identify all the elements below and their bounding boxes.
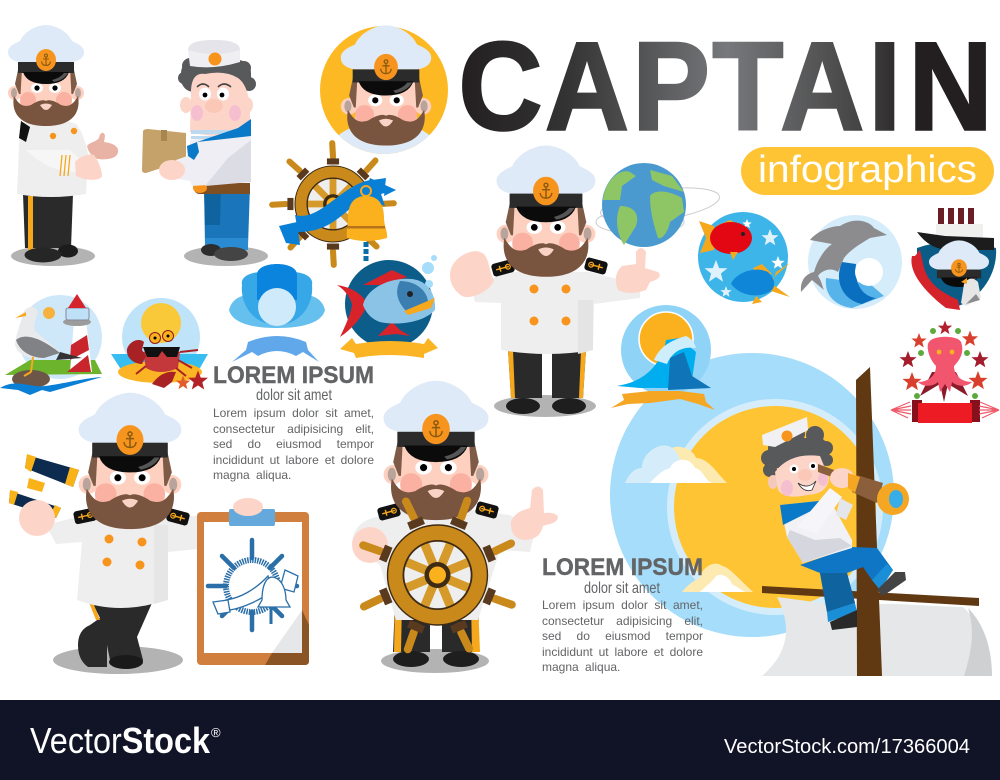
text block: body copy 2: incididunt ut labore et dolore (542, 644, 703, 658)
heading: Lorem Ipsum block 2 (542, 554, 703, 597)
clipboard with wheel sketch (197, 498, 309, 665)
text block: body copy 2: Lorem ipsum dolor sit amet, (542, 598, 703, 612)
title: CAPTAIN: CAPTAIN (458, 17, 993, 156)
footer bar with VectorStock branding: VectorStock (30, 720, 211, 761)
sailor with parcel (142, 40, 268, 266)
text block: body copy 1: consectetur adipisicing elit, (213, 422, 374, 436)
pill: infographics subtitle: infographics (758, 149, 977, 191)
text block: body copy 2 (542, 598, 703, 674)
icon: pearl shell with ribbon (229, 264, 325, 362)
mast and yard (762, 367, 979, 676)
sailor climbing mast with spyglass (761, 417, 909, 630)
text block: body copy 1: magna aliqua. (213, 468, 291, 482)
head: captain (8, 25, 84, 126)
icon: ship wheel (333, 470, 542, 680)
icon: two tropical fish (698, 212, 790, 304)
icon: angler fish (337, 255, 438, 358)
heading: Lorem Ipsum block 1 (213, 362, 374, 404)
icon: captain portrait in circle (320, 26, 448, 154)
heading: Lorem Ipsum block 2: LOREM IPSUM (542, 554, 703, 581)
icon: octopus with starfish wreath and banner (891, 320, 999, 423)
captain spinning a globe (450, 146, 660, 417)
scene: sun, sky, clouds behind mast (610, 353, 894, 637)
heading: Lorem Ipsum block 1: dolor sit amet (256, 387, 332, 404)
captain presenting, top left (8, 25, 118, 266)
icon: crab with sunglasses (111, 298, 208, 390)
icon: dolphin and wave (801, 215, 902, 309)
text block: body copy 2: magna aliqua. (542, 660, 620, 674)
head: captain (384, 381, 488, 520)
icon: seagull and lighthouse (0, 294, 102, 395)
heading: Lorem Ipsum block 2: dolor sit amet (584, 580, 660, 597)
text block: body copy 1 (213, 406, 374, 482)
cloud, lower (682, 564, 753, 592)
cloud, upper (625, 445, 727, 483)
icon: wave on sun badge (611, 305, 715, 410)
head: captain (79, 393, 181, 529)
head: captain (497, 146, 595, 277)
captain with binoculars (9, 393, 198, 674)
sail (762, 597, 992, 676)
icon: globe with orbit rings (596, 163, 722, 247)
text block: body copy 2: sed do eiusmod tempor (542, 629, 703, 643)
icon: ship, captain hat and seagull crest (911, 208, 996, 310)
sketch: wheel and bell (208, 540, 298, 630)
heading: Lorem Ipsum block 1: LOREM IPSUM (213, 362, 374, 389)
text block: body copy 1: incididunt ut labore et dolore (213, 452, 374, 466)
icon: binoculars (9, 454, 79, 518)
footer bar with VectorStock branding (0, 700, 1000, 780)
text block: body copy 2: consectetur adipisicing elit, (542, 614, 703, 628)
footer bar with VectorStock branding: VectorStock.com/17366004 (724, 736, 970, 758)
footer bar with VectorStock branding: ® (211, 725, 221, 740)
icon: ship wheel with ribbon and bell (272, 143, 396, 265)
captain steering ship wheel (333, 381, 558, 680)
text block: body copy 1: Lorem ipsum dolor sit amet, (213, 406, 374, 420)
text block: body copy 1: sed do eiusmod tempor (213, 437, 374, 451)
